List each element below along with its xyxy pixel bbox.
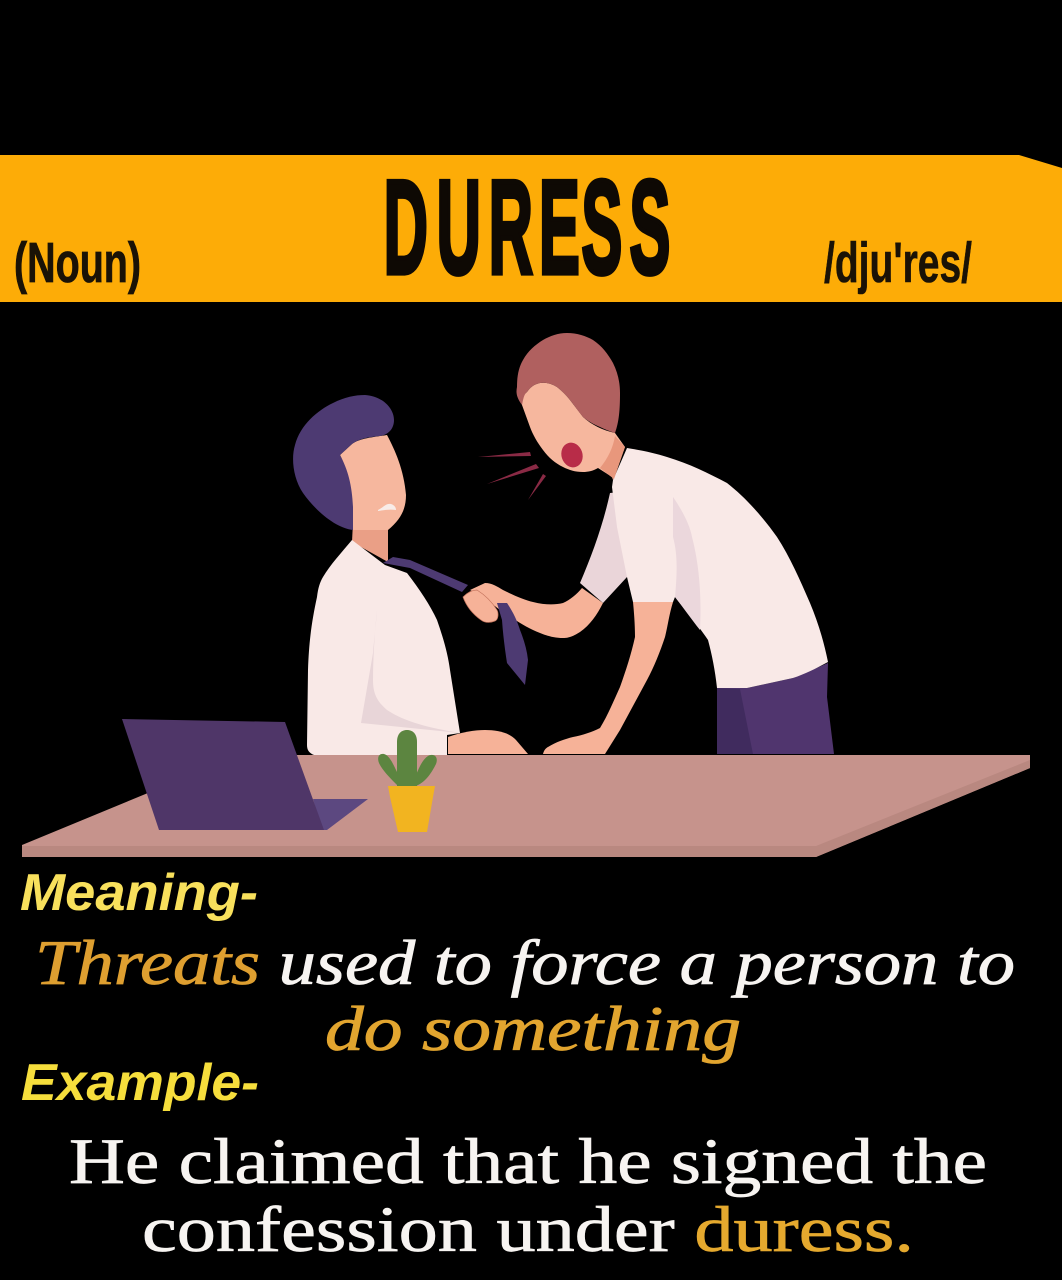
illustration: man grabbing colleague by the tie over a desk — [22, 333, 1030, 857]
standing man — [463, 333, 834, 754]
example text — [69, 1126, 987, 1266]
example text: He claimed that he signed the — [69, 1126, 987, 1198]
desk — [22, 755, 1030, 857]
example heading: Example- — [21, 1054, 259, 1112]
lower tie — [497, 603, 528, 685]
meaning text: Threats used to force a person to — [35, 928, 1015, 998]
meaning heading: Meaning- — [20, 864, 258, 922]
meaning text: do something — [325, 994, 741, 1064]
laptop — [122, 719, 368, 830]
example text: confession under duress. — [142, 1194, 914, 1266]
pronunciation: /dju'res/ — [824, 231, 972, 295]
part of speech label: (Noun) — [14, 231, 141, 295]
shout lines — [478, 452, 546, 500]
header banner — [0, 152, 1062, 302]
potted plant — [378, 730, 437, 832]
meaning text — [35, 928, 1015, 1064]
seated man — [293, 395, 528, 755]
title: DURESS — [384, 152, 670, 301]
fist gripping tie — [463, 590, 498, 622]
